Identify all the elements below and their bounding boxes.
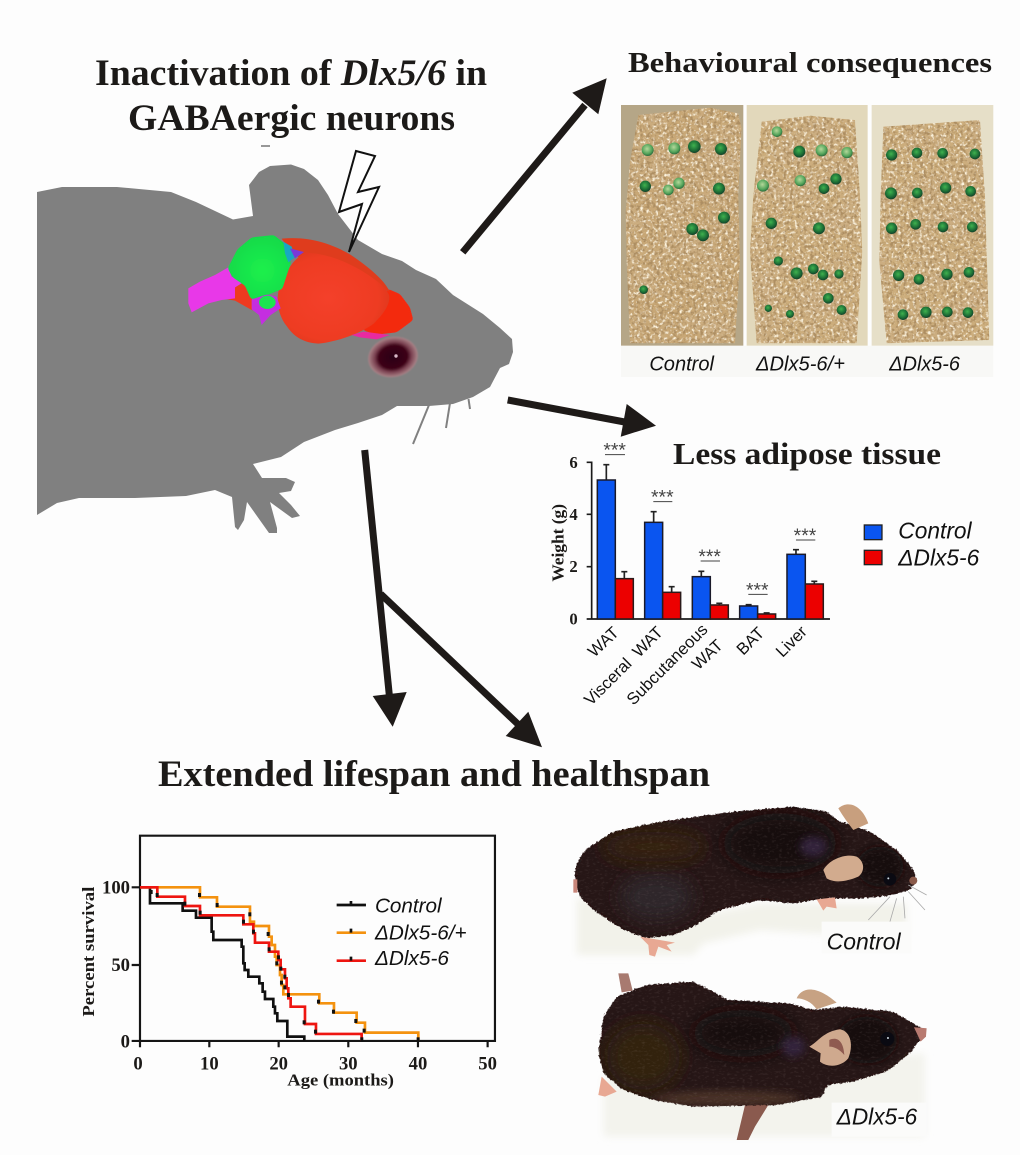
arrow to healthspan xyxy=(381,594,542,747)
x tick labels: 50 xyxy=(478,1053,497,1074)
caption background xyxy=(621,346,993,377)
y axis numbers: 4 xyxy=(569,505,578,524)
brain xyxy=(188,235,413,344)
category labels: Visceral WAT xyxy=(580,623,667,709)
brainstem magenta xyxy=(188,267,244,312)
heading: lifespan: Extended lifespan and healthspan xyxy=(158,754,710,795)
midbrain green xyxy=(259,296,276,309)
eye and nose xyxy=(880,1032,894,1046)
foot xyxy=(598,1077,617,1097)
cerebrum xyxy=(278,253,389,344)
legend: ΔDlx5-6 xyxy=(374,947,449,970)
heading: behaviour: Behavioural consequences xyxy=(628,47,992,79)
y tick labels: 0 xyxy=(121,1031,130,1052)
whiskers xyxy=(868,885,927,922)
y axis numbers: 2 xyxy=(569,557,578,576)
cerebellum xyxy=(228,235,291,299)
ears xyxy=(797,989,837,1009)
tray labels: ΔDlx5-6 xyxy=(888,354,961,376)
panel: marble burying xyxy=(621,105,993,377)
significance marks xyxy=(603,441,817,601)
significance marks: *** xyxy=(651,488,674,509)
legend: ΔDlx5-6/+ xyxy=(374,921,467,944)
y tick labels xyxy=(102,877,130,1052)
tray: knockout xyxy=(872,105,993,346)
tray labels: Control xyxy=(649,354,715,376)
front foot xyxy=(817,897,837,911)
x tick labels: 40 xyxy=(409,1053,427,1074)
legend xyxy=(337,895,467,970)
category labels xyxy=(580,620,811,709)
significance marks: *** xyxy=(794,526,817,547)
mouse illustration xyxy=(37,146,513,533)
label: ΔDlx5-6 xyxy=(836,1103,918,1129)
bar chart: tissue weights xyxy=(548,441,980,709)
tray: heterozygote xyxy=(747,105,868,346)
x axis title: Age (months) xyxy=(287,1071,394,1090)
category labels: Subcutaneous xyxy=(623,620,711,709)
curve: knockout xyxy=(140,887,362,1041)
fur shading xyxy=(598,983,919,1106)
mouse silhouette xyxy=(37,164,513,533)
category labels: WAT xyxy=(688,636,727,674)
x tick labels xyxy=(133,1053,497,1074)
significance marks: *** xyxy=(603,441,626,462)
category labels: WAT xyxy=(584,623,623,661)
label xyxy=(822,922,912,954)
title: inactivation: Inactivation of Dlx5/6 in xyxy=(95,53,487,94)
y tick labels: 100 xyxy=(102,877,130,898)
leg xyxy=(737,1098,768,1140)
control bars xyxy=(597,480,805,619)
eye xyxy=(364,332,422,382)
small mark xyxy=(261,145,270,147)
curve: control xyxy=(140,887,304,1041)
photo background xyxy=(603,1053,925,1137)
brainstem red xyxy=(222,282,259,312)
eye and nose xyxy=(884,873,896,886)
y axis numbers: 6 xyxy=(569,453,578,472)
significance marks: *** xyxy=(698,547,721,568)
legend: ΔDlx5-6 xyxy=(897,544,980,570)
lightning bolt xyxy=(339,151,379,252)
x tick labels: 10 xyxy=(200,1053,219,1074)
fur shading xyxy=(573,803,920,943)
cyan region xyxy=(283,242,295,262)
category labels: BAT xyxy=(733,623,768,659)
cortex back xyxy=(282,238,390,292)
body xyxy=(575,807,917,938)
y axis numbers xyxy=(569,453,578,628)
tail stub xyxy=(573,879,577,893)
title: inactivation: GABAergic neurons xyxy=(128,98,455,139)
x tick labels: 30 xyxy=(339,1053,358,1074)
ears xyxy=(838,804,868,830)
mutant bars xyxy=(615,579,823,619)
category labels: Liver xyxy=(772,622,811,661)
legend xyxy=(864,517,980,570)
purple region xyxy=(290,248,304,258)
x tick labels: 0 xyxy=(133,1053,143,1074)
tray labels: ΔDlx5-6/+ xyxy=(755,354,845,376)
olfactory bulb xyxy=(362,289,413,335)
body xyxy=(598,982,927,1107)
y axis title: Weight (g) xyxy=(548,504,567,582)
x tick labels: 20 xyxy=(269,1053,288,1074)
arrow to lifespan xyxy=(365,450,407,727)
label: Control xyxy=(827,928,902,954)
whiskers xyxy=(413,399,470,444)
legend: Control xyxy=(898,517,973,543)
photo: control mouse xyxy=(573,803,927,957)
label xyxy=(832,1103,927,1137)
plot frame xyxy=(132,836,495,1047)
title: inactivation xyxy=(95,53,487,139)
y tick labels: 50 xyxy=(111,955,130,976)
tail xyxy=(618,973,633,992)
arrow to adipose xyxy=(508,400,656,437)
y axis title: Percent survival xyxy=(79,886,98,1017)
legend: Control xyxy=(375,895,443,918)
arrow to behaviour xyxy=(463,78,607,252)
survival chart xyxy=(79,836,497,1090)
censor ticks xyxy=(150,890,420,1041)
tray labels xyxy=(649,354,961,376)
tray: control xyxy=(621,105,743,346)
significance marks: *** xyxy=(746,580,769,601)
heading: adipose: Less adipose tissue xyxy=(673,436,941,471)
photo background xyxy=(577,897,907,955)
ventral strip xyxy=(352,332,390,339)
error bars xyxy=(603,465,817,614)
rear foot xyxy=(640,937,675,957)
curve: heterozygote xyxy=(140,887,418,1041)
y axis numbers: 0 xyxy=(569,609,578,628)
photo: knockout mouse xyxy=(593,973,930,1140)
pons magenta xyxy=(252,295,281,325)
axes xyxy=(587,462,830,619)
mouse photos xyxy=(573,803,930,1140)
